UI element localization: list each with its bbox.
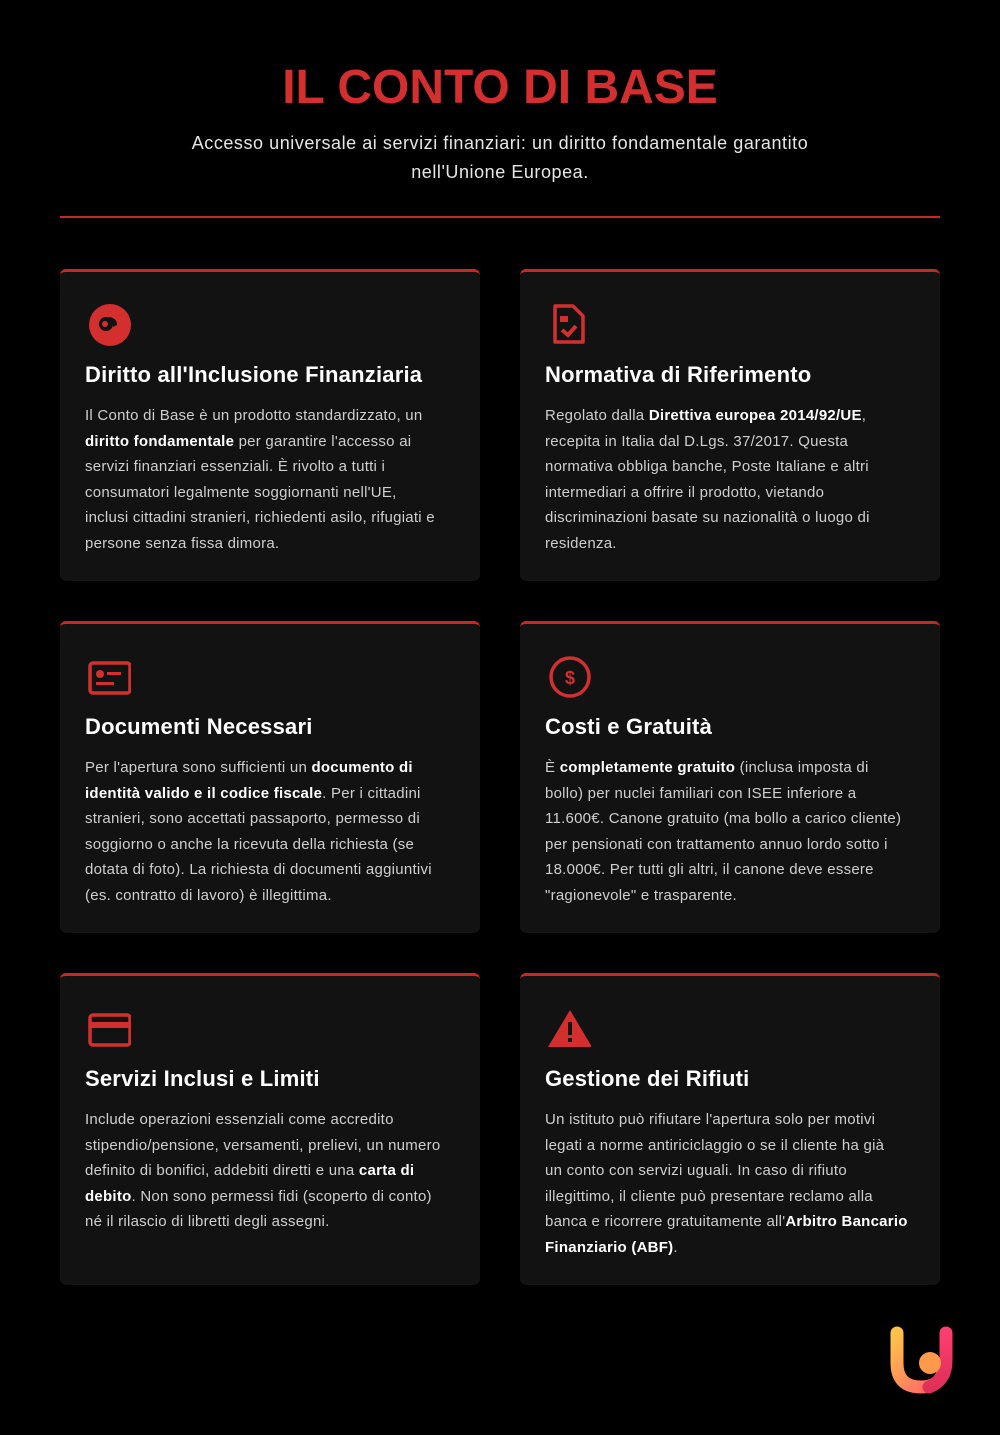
panel: costi <box>520 621 940 933</box>
text: un conto con servizi uguali. In caso di rifiuto <box>545 1162 847 1179</box>
text: banca e ricorrere gratuitamente all'Arbitro Bancario <box>545 1213 908 1230</box>
subtitle <box>192 133 808 182</box>
panel: documenti <box>60 621 480 933</box>
text: stipendio/pensione, versamenti, prelievi, un numero <box>85 1136 440 1154</box>
text <box>85 759 432 904</box>
text: inclusi cittadini stranieri, richiedenti asilo, rifugiati e <box>85 509 435 526</box>
text: intermediari a offrire il prodotto, vietando <box>545 484 824 500</box>
text: (es. contratto di lavoro) è illegittima. <box>85 886 332 904</box>
text: illegittimo, il cliente può presentare reclamo alla <box>545 1188 873 1204</box>
icon: document <box>553 304 585 344</box>
text: 11.600€. Canone gratuito (ma bollo a carico cliente) <box>545 810 901 827</box>
text: Include operazioni essenziali come accredito <box>85 1111 394 1128</box>
text: Il Conto di Base è un prodotto standardizzato, un <box>85 407 422 424</box>
icon: credit card <box>88 1013 131 1047</box>
text: 18.000€. Per tutti gli altri, il canone deve essere <box>545 861 874 878</box>
text: legati a norme antiriciclaggio o se il cliente ha già <box>545 1136 884 1154</box>
text: Regolato dalla Direttiva europea 2014/92/UE, <box>545 407 866 424</box>
subtitle: nell'Unione Europea. <box>411 162 589 182</box>
text: diritto fondamentale per garantire l'accesso ai <box>85 432 411 450</box>
text: normativa obbliga banche, Poste Italiane e altri <box>545 458 869 475</box>
heading: Documenti Necessari <box>85 714 313 739</box>
text <box>85 1111 440 1230</box>
panel: inclusione <box>60 269 480 581</box>
text: residenza. <box>545 534 617 552</box>
panel: rifiuti <box>520 973 940 1285</box>
text: stranieri, sono accettati passaporto, permesso di <box>85 810 420 827</box>
heading: Diritto all'Inclusione Finanziaria <box>85 362 422 387</box>
icon: warning <box>548 1010 591 1047</box>
heading: Costi e Gratuità <box>545 714 712 739</box>
text: discriminazioni basate su nazionalità o luogo di <box>545 509 870 526</box>
logo <box>890 1326 952 1394</box>
text: È completamente gratuito (inclusa imposta di <box>545 759 869 776</box>
icon: circle <box>89 304 131 346</box>
text <box>545 759 901 904</box>
text: Un istituto può rifiutare l'apertura solo per motivi <box>545 1111 875 1128</box>
text: "ragionevole" e trasparente. <box>545 886 737 904</box>
text: per pensionati con trattamento annuo lordo sotto i <box>545 836 888 852</box>
title: IL CONTO DI BASE <box>282 61 718 114</box>
text: persone senza fissa dimora. <box>85 534 279 552</box>
text: identità valido e il codice fiscale. Per i cittadini <box>85 784 421 802</box>
panel: normativa <box>520 269 940 581</box>
text: Finanziario (ABF). <box>545 1238 678 1256</box>
panel: servizi <box>60 973 480 1285</box>
icon: coin: $ <box>565 668 575 688</box>
text <box>545 407 870 552</box>
text: recepita in Italia dal D.Lgs. 37/2017. Questa <box>545 432 848 450</box>
heading: Normativa di Riferimento <box>545 362 811 387</box>
text: dotata di foto). La richiesta di documenti aggiuntivi <box>85 861 432 878</box>
subtitle: Accesso universale ai servizi finanziari: un diritto fondamentale garantito <box>192 133 808 153</box>
icon: coin <box>549 656 591 698</box>
text: consumatori legalmente soggiornanti nell'UE, <box>85 484 397 500</box>
text: definito di bonifici, addebiti diretti e una carta di <box>85 1162 414 1179</box>
heading: Gestione dei Rifiuti <box>545 1066 749 1091</box>
text: bollo) per nuclei familiari con ISEE inferiore a <box>545 784 856 802</box>
text <box>545 1111 908 1256</box>
text: né il rilascio di libretti degli assegni. <box>85 1213 330 1230</box>
icon: id card <box>88 661 131 695</box>
text: Per l'apertura sono sufficienti un documento di <box>85 759 413 776</box>
text: debito. Non sono permessi fidi (scoperto di conto) <box>85 1188 432 1204</box>
text <box>85 407 435 552</box>
text: servizi finanziari essenziali. È rivolto a tutti i <box>85 458 385 475</box>
text: soggiorno o anche la ricevuta della richiesta (se <box>85 836 414 852</box>
heading: Servizi Inclusi e Limiti <box>85 1066 320 1091</box>
